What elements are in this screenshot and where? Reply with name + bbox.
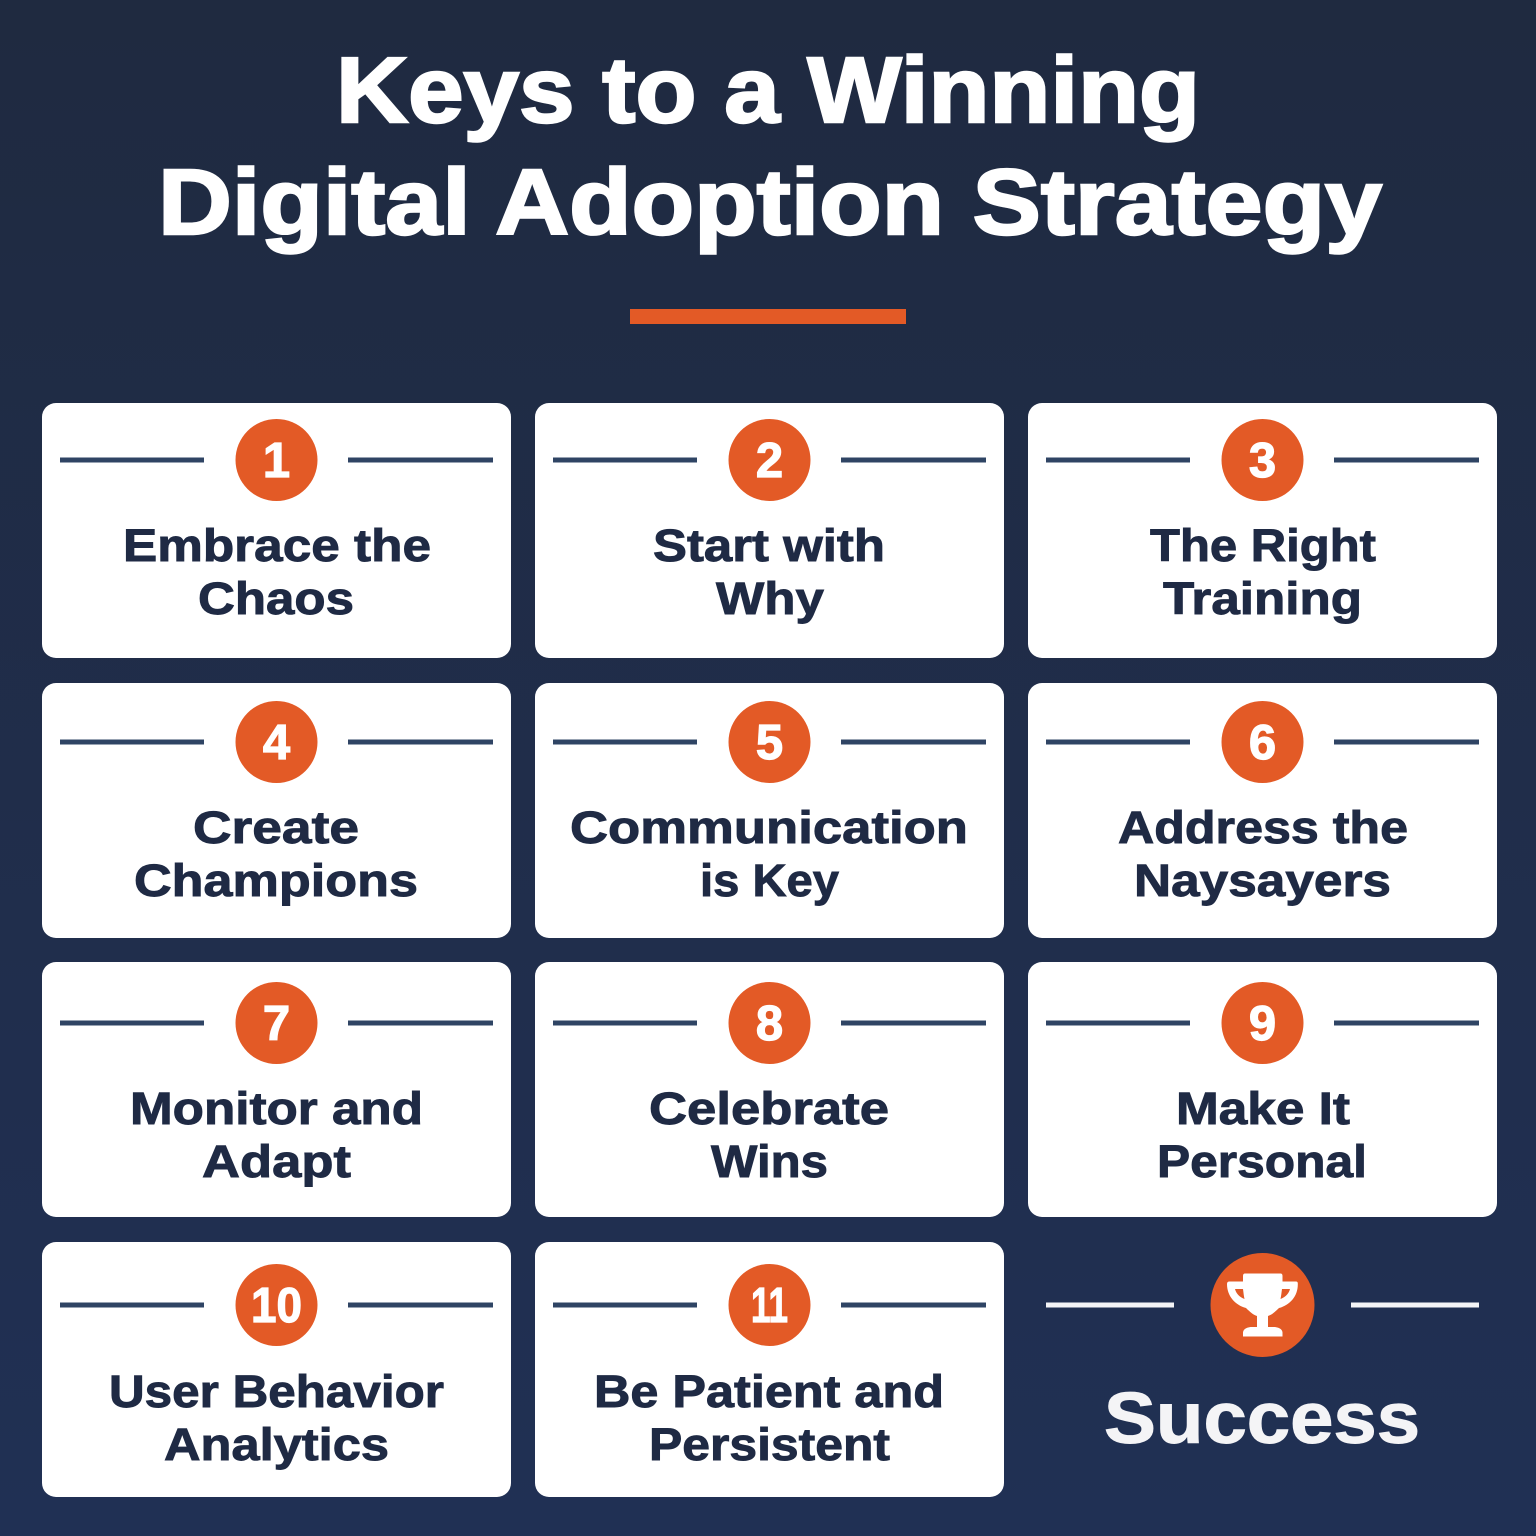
card 8 label: Celebrate — [649, 1083, 889, 1134]
number badge 4 — [236, 701, 318, 783]
card 9 label — [1157, 1083, 1367, 1187]
card 1: Embrace the Chaos — [42, 403, 511, 658]
card 7 label: Adapt — [202, 1136, 351, 1187]
number badge 3: 3 — [1249, 434, 1276, 488]
card 4 label — [134, 802, 418, 906]
card 11: Be Patient and Persistent — [535, 1242, 1004, 1497]
number badge 6: 6 — [1249, 716, 1276, 770]
card 8 label: Wins — [711, 1136, 828, 1187]
card 11 label — [594, 1366, 944, 1470]
card 6 label: Naysayers — [1134, 855, 1391, 906]
number badge 5: 5 — [756, 716, 783, 770]
card 2 label: Why — [716, 573, 824, 624]
card 1 label: Embrace the — [123, 520, 431, 571]
card 5: Communication is Key — [535, 683, 1004, 938]
number badge 7 — [236, 982, 318, 1064]
card 6 label — [1118, 802, 1408, 906]
number badge 2: 2 — [756, 434, 783, 488]
icon: trophy — [1227, 1274, 1298, 1336]
number badge 3 — [1222, 419, 1304, 501]
number badge 10: 10 — [251, 1279, 302, 1333]
number badge 1 — [236, 419, 318, 501]
number badge 5 — [728, 701, 810, 783]
card 10 label — [109, 1366, 444, 1470]
card 4 label: Champions — [134, 855, 418, 906]
title — [158, 38, 1382, 254]
number badge 9 — [1222, 982, 1304, 1064]
card 3 label: Training — [1163, 573, 1362, 624]
card 3: The Right Training — [1028, 403, 1497, 658]
card 2 label: Start with — [653, 520, 885, 571]
card 10 label: User Behavior — [109, 1366, 444, 1417]
number badge 8 — [728, 982, 810, 1064]
card 7 label: Monitor and — [130, 1083, 423, 1134]
card 5 label: is Key — [700, 855, 839, 906]
card 6: Address the Naysayers — [1028, 683, 1497, 938]
card 5 label — [570, 802, 968, 906]
number badge 7: 7 — [263, 997, 290, 1051]
card 7: Monitor and Adapt — [42, 962, 511, 1217]
card 11 label: Persistent — [649, 1419, 890, 1470]
number badge 11: 11 — [751, 1279, 788, 1333]
success label: Success — [1104, 1379, 1420, 1459]
title: Digital Adoption Strategy — [158, 150, 1382, 254]
card 6 label: Address the — [1118, 802, 1408, 853]
card 1 label: Chaos — [198, 573, 354, 624]
card 2: Start with Why — [535, 403, 1004, 658]
card 11 label: Be Patient and — [594, 1366, 944, 1417]
card 10 label: Analytics — [164, 1419, 389, 1470]
card 4 label: Create — [193, 802, 359, 853]
card 8 label — [649, 1083, 889, 1187]
success panel — [1046, 1253, 1479, 1459]
number badge 10 — [236, 1264, 318, 1346]
card 3 label — [1150, 520, 1376, 624]
number badge 1: 1 — [263, 434, 290, 488]
title underline accent — [630, 309, 906, 324]
card 9 label: Personal — [1157, 1136, 1367, 1187]
number badge 6 — [1222, 701, 1304, 783]
number badge 2 — [728, 419, 810, 501]
number badge 4: 4 — [263, 716, 290, 770]
card 7 label — [130, 1083, 423, 1187]
card 8: Celebrate Wins — [535, 962, 1004, 1217]
card 3 label: The Right — [1150, 520, 1376, 571]
number badge 11 — [728, 1264, 810, 1346]
card 9 label: Make It — [1176, 1083, 1350, 1134]
number badge 9: 9 — [1249, 997, 1276, 1051]
card 1 label — [123, 520, 431, 624]
card 5 label: Communication — [570, 802, 968, 853]
card 10: User Behavior Analytics — [42, 1242, 511, 1497]
title: Keys to a Winning — [336, 38, 1200, 142]
card 4: Create Champions — [42, 683, 511, 938]
card 2 label — [653, 520, 885, 624]
card 9: Make It Personal — [1028, 962, 1497, 1217]
number badge 8: 8 — [756, 997, 783, 1051]
